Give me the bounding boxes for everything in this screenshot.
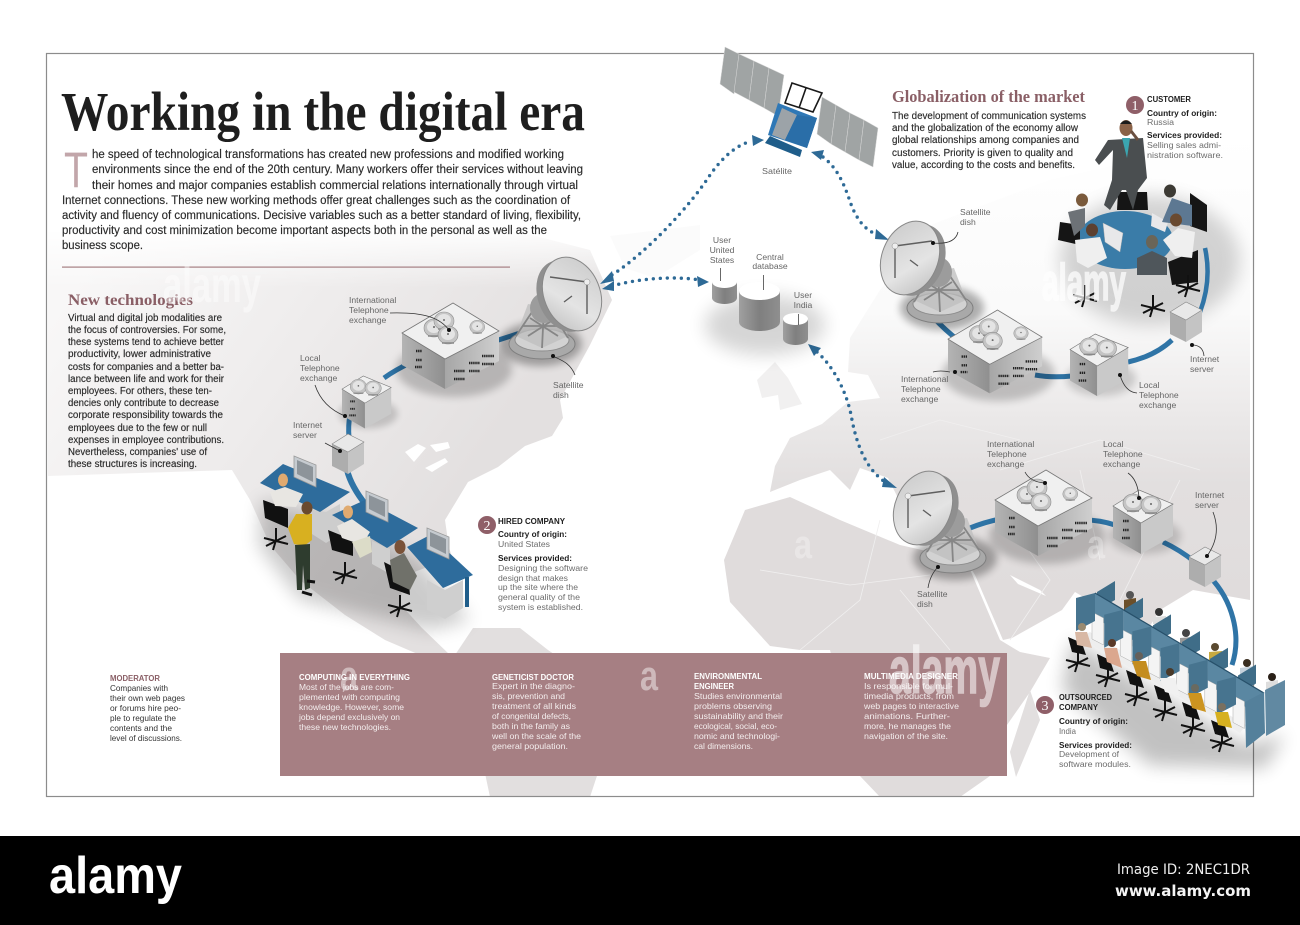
text block: globalization: The development of communication systems xyxy=(892,111,1086,122)
panel: professions xyxy=(280,653,1007,776)
column: environmental engineer: problems observing xyxy=(694,701,772,711)
labels: United States network: dish xyxy=(553,390,569,400)
column: multimedia designer: web pages to interactive xyxy=(863,701,959,711)
satellite xyxy=(720,47,878,167)
labels: India network: dish xyxy=(917,599,933,609)
column: computing in everything: knowledge. However, some xyxy=(299,702,404,712)
labels: Russia network: Telephone xyxy=(1139,390,1179,400)
column: geneticist doctor: GENETICIST DOCTOR xyxy=(492,672,575,682)
labels: India network: exchange xyxy=(987,459,1024,469)
text block: new technologies: these systems tend to achieve better xyxy=(68,337,225,348)
satellite dish: Russia xyxy=(870,212,984,330)
callout: outsourced company: software modules. xyxy=(1059,759,1131,769)
column: geneticist doctor: well on the scale of the xyxy=(491,731,581,741)
labels: India network: International xyxy=(987,439,1034,449)
callout: outsourced company: COMPANY xyxy=(1059,702,1098,712)
text block: moderator: or forums hire peo- xyxy=(110,703,181,713)
labels: Russia network xyxy=(901,207,1220,410)
text block: new technologies: employees. For others, these ten- xyxy=(68,386,212,397)
callout: customer: CUSTOMER xyxy=(1147,94,1192,104)
column: computing in everything xyxy=(298,672,410,732)
satellite dish: India xyxy=(883,462,997,580)
intro paragraph: their homes and major companies establish commercial relations internationally through virtual xyxy=(92,180,578,192)
text block: new technologies: lance between life and work for their xyxy=(68,374,225,385)
column: environmental engineer: sustainability and their xyxy=(694,711,783,721)
internet server: Russia xyxy=(1170,302,1202,342)
labels: India network: server xyxy=(1195,500,1219,510)
callout: hired company: United States xyxy=(498,539,550,549)
text block: new technologies: Virtual and digital job modalities are xyxy=(68,313,223,324)
labels: India network: Local xyxy=(1103,439,1124,449)
drop cap: T xyxy=(64,142,88,198)
text block: globalization: global relationships among companies and xyxy=(892,135,1079,146)
column: multimedia designer: Is responsible for mul- xyxy=(864,681,953,691)
text block: new technologies: employees due to the few or null xyxy=(68,423,207,434)
labels: database: User xyxy=(794,290,812,300)
outsourced company cubicles xyxy=(1062,581,1285,768)
stock photo watermarks: a xyxy=(794,523,813,567)
labels: India network: Internet xyxy=(1195,490,1225,500)
labels: United States network: exchange xyxy=(300,373,337,383)
callout: hired company: up the site where the xyxy=(498,582,578,592)
stock photo footer bar xyxy=(0,836,1300,925)
text block: globalization: value, according to the costs and benefits. xyxy=(892,160,1075,171)
labels: United States network: Telephone xyxy=(349,305,389,315)
network: Russia connection lines xyxy=(934,248,1208,377)
labels: database: Central xyxy=(756,252,784,262)
labels: database: database xyxy=(752,261,788,271)
dotted link: database to lower dish xyxy=(808,344,897,488)
column: multimedia designer: timedia products, from xyxy=(864,691,954,701)
customer standing xyxy=(1095,120,1147,210)
column: geneticist doctor: treatment of all kinds xyxy=(492,701,576,711)
intro paragraph: productivity and cost minimization become important aspects both in the personal as well as the xyxy=(62,225,547,237)
labels: Russia network: exchange xyxy=(1139,400,1176,410)
stock photo watermarks: alamy xyxy=(1042,254,1126,312)
internet server: India xyxy=(1189,547,1221,587)
callout: hired company: HIRED COMPANY xyxy=(498,516,565,526)
column: multimedia designer: animations. Further- xyxy=(864,711,950,721)
labels: database: United xyxy=(710,245,735,255)
hired company desks xyxy=(258,456,473,630)
callout: outsourced company: 3 xyxy=(1042,699,1048,714)
text block: moderator: level of discussions. xyxy=(110,733,182,743)
text block: new technologies: productivity, lower administrative xyxy=(68,349,212,360)
labels: United States network: Local xyxy=(300,353,321,363)
callout: customer: Russia xyxy=(1147,117,1174,127)
labels: United States network: exchange xyxy=(349,315,386,325)
labels: database: India xyxy=(794,300,813,310)
stock photo watermarks: alamy xyxy=(163,257,261,313)
satellite dish: United States xyxy=(498,248,612,366)
text block: new technologies: the focus of controversies. For some, xyxy=(68,325,226,336)
text block: new technologies: dencies only contribute to decrease xyxy=(68,398,220,409)
column: environmental engineer: cal dimensions. xyxy=(694,741,753,751)
labels: Russia network: server xyxy=(1190,364,1214,374)
labels: Russia network: Satellite xyxy=(960,207,991,217)
text block: new technologies: corporate responsibility towards the xyxy=(68,410,224,421)
international exchange: United States xyxy=(396,303,512,397)
labels: Russia network: Internet xyxy=(1190,354,1220,364)
callout: outsourced company xyxy=(1036,692,1132,769)
labels: India network xyxy=(917,439,1225,609)
column: computing in everything: these new technologies. xyxy=(299,722,391,732)
stock photo footer bar: alamy xyxy=(49,847,182,905)
stock photo watermarks: a xyxy=(1087,523,1106,567)
text block: globalization: customers. Priority is given to quality and xyxy=(892,148,1073,159)
dotted link: satellite to right dish xyxy=(811,150,889,240)
world map background xyxy=(47,135,1250,797)
local exchange: India xyxy=(1109,490,1181,554)
callout: outsourced company: India xyxy=(1059,726,1076,736)
column: multimedia designer: more, he manages the xyxy=(864,721,951,731)
labels: United States network: International xyxy=(349,295,396,305)
title: Working in the digital era xyxy=(61,81,585,142)
callout: hired company: design that makes xyxy=(498,573,568,583)
labels: Russia network: Local xyxy=(1139,380,1160,390)
intro paragraph: environments since the end of the 20th century. Many workers offer their services without leaving xyxy=(92,164,583,176)
stock photo watermarks: a xyxy=(340,652,358,699)
labels: India network: Satellite xyxy=(917,589,948,599)
callout: outsourced company: Development of xyxy=(1059,749,1120,759)
labels: United States network: Telephone xyxy=(300,363,340,373)
callout: hired company: Services provided: xyxy=(498,553,572,563)
text block: moderator: their own web pages xyxy=(110,693,185,703)
heading: globalization of the market: Globalization of the market xyxy=(892,87,1085,106)
intro paragraph: activity and fluency of communications. Decisive variables such as a better standard of living, flexibility, xyxy=(62,210,581,222)
heading: new technologies: New technologies xyxy=(68,292,193,309)
dotted link: left dish to database xyxy=(602,276,709,291)
intro paragraph: business scope. xyxy=(62,240,143,252)
intro paragraph xyxy=(62,142,583,252)
callout: customer: Country of origin: xyxy=(1147,108,1217,118)
text block: globalization: and the globalization of the economy allow xyxy=(892,123,1079,134)
text block: moderator: MODERATOR xyxy=(110,673,161,683)
labels: Russia network: International xyxy=(901,374,948,384)
stock photo footer bar: www.alamy.com xyxy=(1115,882,1251,900)
callout: hired company: 2 xyxy=(484,519,490,534)
callout: hired company: general quality of the xyxy=(498,592,580,602)
international exchange: Russia xyxy=(942,310,1055,401)
column: geneticist doctor: Expert in the diagno- xyxy=(492,681,575,691)
local exchange: United States xyxy=(339,376,398,428)
column: multimedia designer: MULTIMEDIA DESIGNER xyxy=(864,671,959,681)
text block: moderator: contents and the xyxy=(110,723,172,733)
column: computing in everything: plemented with computing xyxy=(299,692,400,702)
network: United States connection lines xyxy=(347,333,520,505)
text block: new technologies: costs for companies and a better ba- xyxy=(68,362,224,373)
callout: customer: Selling sales admi- xyxy=(1147,140,1221,150)
callout: hired company: Designing the software xyxy=(498,563,588,573)
labels: India network: Telephone xyxy=(987,449,1027,459)
labels: United States network: Internet xyxy=(293,420,323,430)
callout: customer: Services provided: xyxy=(1147,130,1222,140)
internet server: United States xyxy=(332,434,364,474)
column: geneticist doctor: general population. xyxy=(492,741,568,751)
column: geneticist doctor: both in the family as xyxy=(492,721,570,731)
column: multimedia designer: navigation of the site. xyxy=(864,731,948,741)
column: environmental engineer xyxy=(694,671,783,751)
column: environmental engineer: ENVIRONMENTAL xyxy=(694,671,762,681)
column: environmental engineer: ecological, social, eco- xyxy=(694,721,777,731)
stock photo watermarks: a xyxy=(640,652,658,699)
column: geneticist doctor xyxy=(491,672,581,751)
network: India connection lines xyxy=(970,519,1236,665)
intro paragraph: Internet connections. These new working methods offer great challenges such as the coordination of xyxy=(62,195,571,207)
stock photo footer bar: Image ID: 2NEC1DR xyxy=(1117,862,1250,878)
column: environmental engineer: Studies environmental xyxy=(694,691,782,701)
text block: globalization xyxy=(892,111,1086,171)
labels: United States network: Satellite xyxy=(553,380,584,390)
local exchange: Russia xyxy=(1066,334,1136,396)
column: environmental engineer: ENGINEER xyxy=(694,681,735,691)
column: geneticist doctor: of congenital defects, xyxy=(492,711,571,721)
stock photo watermarks: alamy xyxy=(889,633,1000,707)
text block: moderator: ple to regulate the xyxy=(110,713,176,723)
column: computing in everything: jobs depend exclusively on xyxy=(298,712,400,722)
callout: hired company: Country of origin: xyxy=(498,529,567,539)
labels: Russia network: dish xyxy=(960,217,976,227)
column: computing in everything: Most of the jobs are com- xyxy=(299,682,394,692)
text block: moderator xyxy=(110,673,185,743)
customer meeting table xyxy=(1058,184,1240,325)
intro paragraph: he speed of technological transformations has created new professions and modified working xyxy=(92,149,564,161)
dotted link: satellite to left dish xyxy=(600,135,764,284)
callout: hired company xyxy=(478,516,588,612)
callout: customer: nistration software. xyxy=(1147,150,1223,160)
callout: hired company: system is established. xyxy=(498,602,583,612)
text block: moderator: Companies with xyxy=(110,683,168,693)
labels: India network: exchange xyxy=(1103,459,1140,469)
text block: new technologies: Nevertheless, companies' use of xyxy=(68,447,207,458)
callout: outsourced company: Services provided: xyxy=(1059,740,1132,750)
labels: Russia network: Telephone xyxy=(901,384,941,394)
stock photo watermarks xyxy=(163,254,1126,707)
international exchange: India xyxy=(989,470,1105,564)
text block: new technologies xyxy=(68,313,226,470)
callout: outsourced company: OUTSOURCED xyxy=(1059,692,1112,702)
column: environmental engineer: nomic and technologi- xyxy=(694,731,780,741)
labels: India network: Telephone xyxy=(1103,449,1143,459)
label: satellite: Satélite xyxy=(762,166,792,176)
divider rule xyxy=(62,266,510,268)
labels: database: User xyxy=(713,235,731,245)
labels: United States network: server xyxy=(293,430,317,440)
labels: database xyxy=(710,235,813,310)
text block: new technologies: these structures is increasing. xyxy=(68,459,197,470)
text block: new technologies: expenses in employee contributions. xyxy=(68,435,224,446)
column: computing in everything: COMPUTING IN EVERYTHING xyxy=(299,672,410,682)
labels: database: States xyxy=(710,255,734,265)
column: multimedia designer xyxy=(863,671,959,741)
page frame xyxy=(46,54,1254,796)
callout: customer: 1 xyxy=(1132,99,1138,114)
labels: Russia network: exchange xyxy=(901,394,938,404)
column: geneticist doctor: sis, prevention and xyxy=(492,691,565,701)
callout: customer xyxy=(1126,94,1223,160)
central database cylinders xyxy=(705,268,825,355)
callout: outsourced company: Country of origin: xyxy=(1059,716,1128,726)
labels: United States network xyxy=(293,295,584,453)
